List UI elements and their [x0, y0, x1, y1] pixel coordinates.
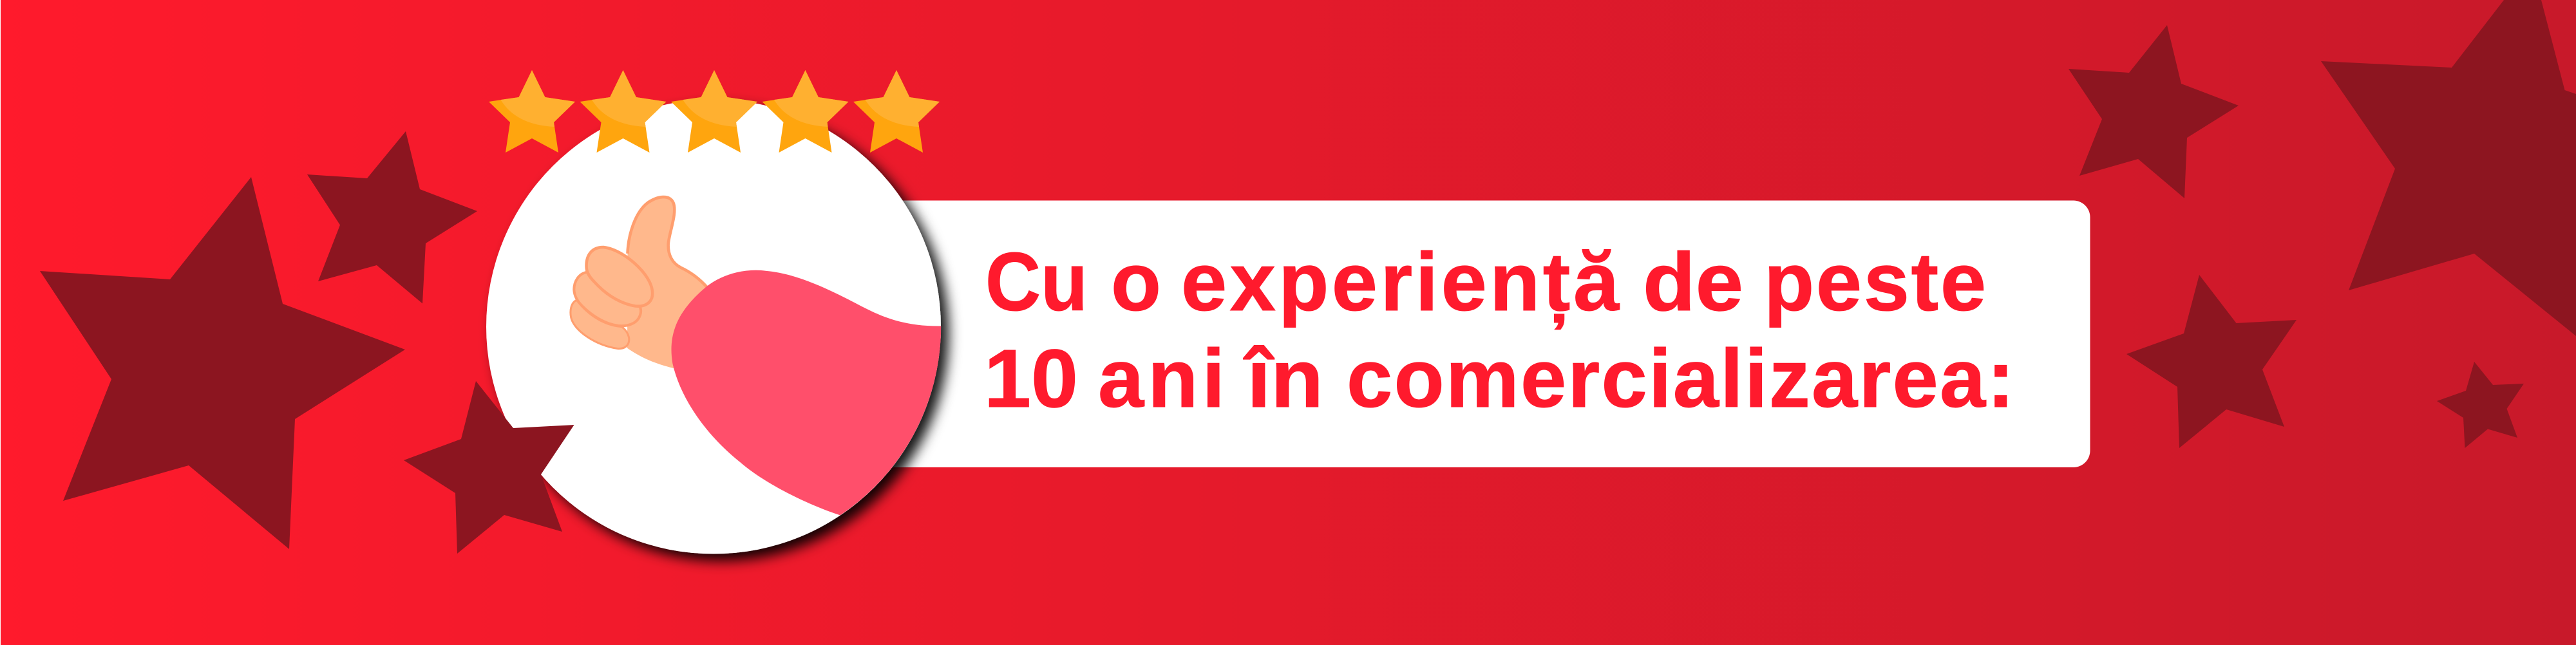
icon: thumbs up hand and sleeve	[571, 197, 941, 515]
heading line 1	[985, 236, 1986, 330]
rating star 1	[489, 70, 575, 153]
thumb outline	[627, 197, 707, 287]
heading text	[984, 236, 2014, 425]
heading line 2: comercializarea:	[1347, 333, 2014, 425]
heading line 2: ani	[1098, 333, 1225, 425]
white text panel	[837, 201, 2090, 467]
rating star 2	[580, 70, 666, 153]
sleeve	[672, 270, 941, 515]
rating star 4	[762, 70, 849, 153]
middle finger	[574, 272, 641, 326]
heading line 1: peste	[1764, 236, 1986, 328]
rating star 3	[671, 70, 757, 153]
circle with shadow	[486, 99, 941, 554]
rating star 5	[853, 70, 940, 153]
heading line 2: în	[1243, 333, 1323, 425]
left decorative stars	[40, 131, 477, 549]
heading line 1: de	[1643, 236, 1743, 328]
thumb and palm	[627, 197, 707, 373]
heading line 1: Cu	[985, 236, 1088, 328]
heading line 2: 10	[984, 333, 1078, 425]
index finger	[587, 247, 652, 306]
heading line 1: experiență	[1181, 236, 1620, 330]
bottom finger	[571, 300, 629, 349]
heading line 2	[984, 333, 2014, 425]
foreground dark star	[404, 381, 574, 554]
right decorative stars	[2069, 0, 2576, 448]
heading line 1: o	[1111, 236, 1161, 328]
five star rating	[489, 70, 940, 153]
